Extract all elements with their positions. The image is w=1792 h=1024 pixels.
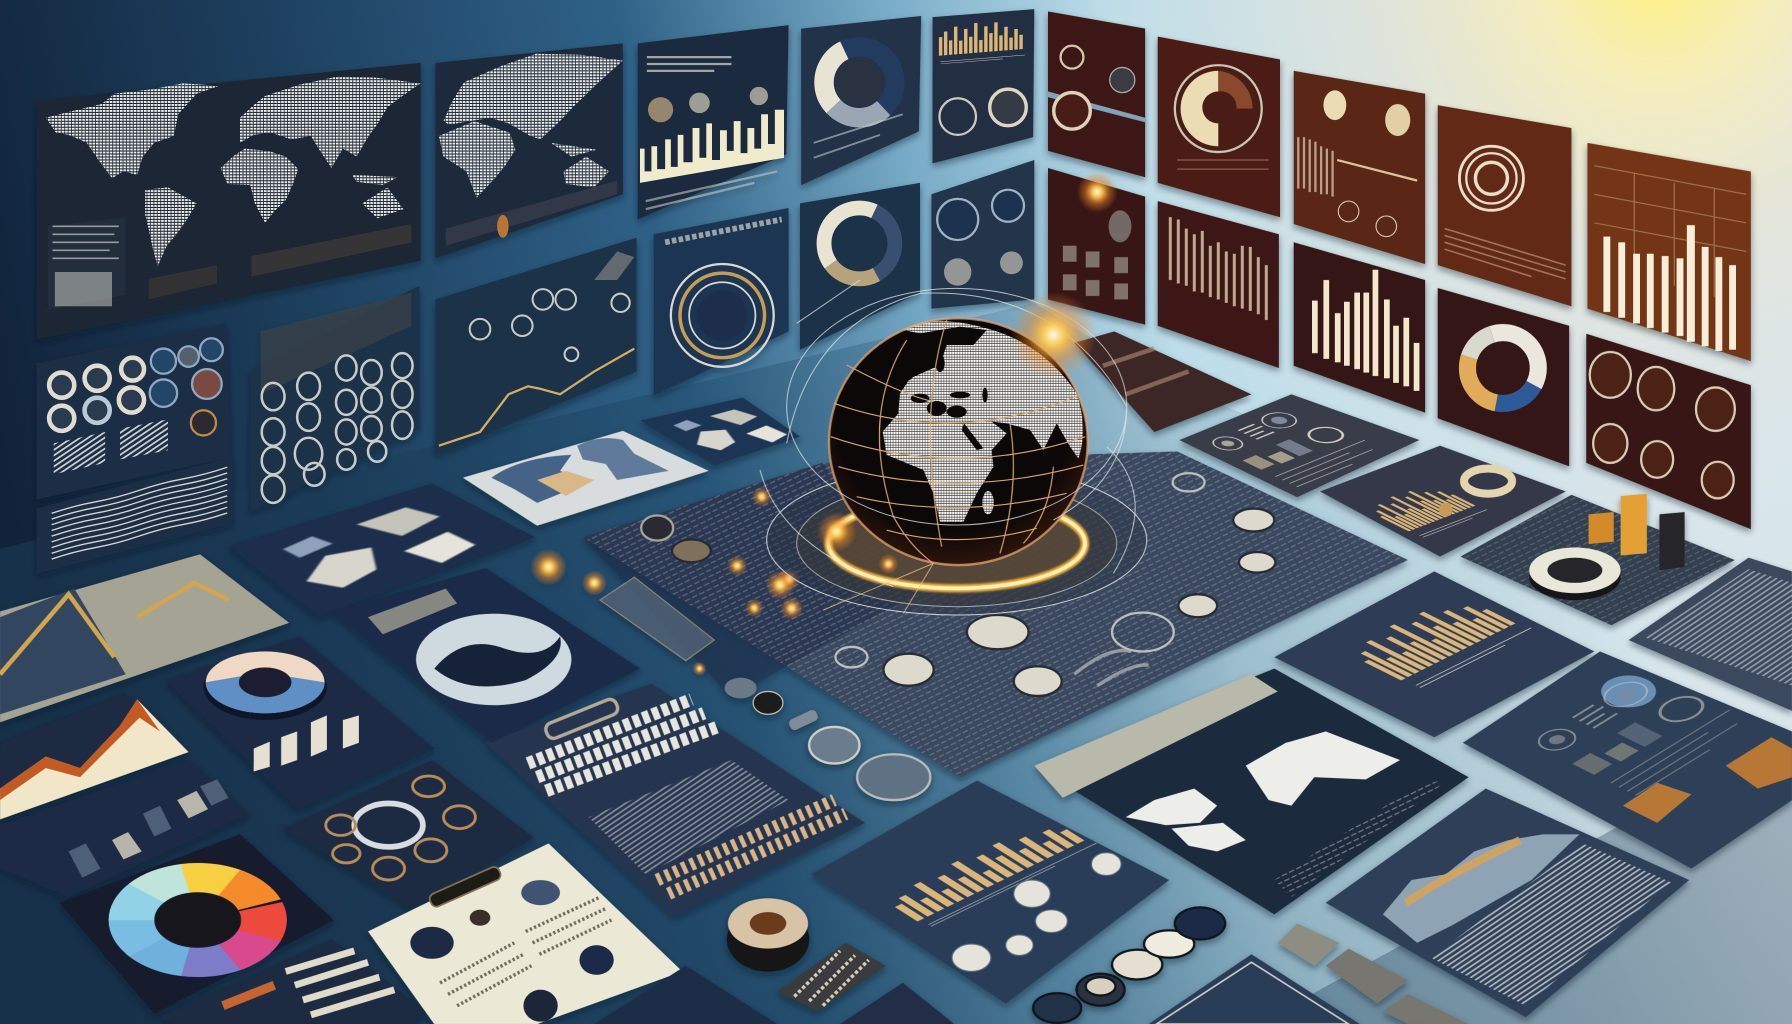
icon: bottom button row: [1033, 907, 1225, 1023]
panel: small navy card: [640, 398, 800, 465]
panel: icon matrix: [250, 286, 419, 512]
panel: golden wave chart: [1274, 571, 1594, 737]
land gaps: [903, 355, 988, 450]
icon: 3d blocks: [1589, 494, 1685, 570]
icon: lens flare: [752, 292, 1097, 620]
panel: open atlas book: [463, 431, 709, 526]
right wall panels: [1048, 11, 1751, 529]
globe centerpiece: [752, 280, 1147, 620]
panel: folded chart sheet: [0, 554, 289, 722]
panel: floor cards top right: [1179, 394, 1419, 497]
glass orbit lines: [760, 280, 1135, 613]
panel: orange bars sheet: [811, 781, 1169, 1003]
panel: maroon dense chart: [1158, 201, 1279, 368]
panel: maroon grid bar chart: [1587, 143, 1751, 361]
panel: maroon ring grid: [1586, 334, 1751, 529]
panel: world map large: [37, 63, 421, 339]
panel: swirling rings sheet: [283, 760, 534, 909]
panel: maroon donut: [1438, 288, 1569, 466]
panel: cream bar chart: [638, 25, 789, 219]
globe sphere: [829, 318, 1088, 565]
panel: donut chart: [801, 16, 921, 185]
icon: clip: [428, 865, 502, 908]
panel: maroon floor sheet: [1074, 331, 1251, 432]
panel: striped document: [486, 683, 865, 917]
panel: concentric rings: [1438, 105, 1571, 306]
panel: maroon icons 1: [1048, 11, 1145, 177]
map: dotted white continents: [1126, 731, 1400, 851]
panel: wavy lines: [37, 457, 232, 574]
panel: globe photo sheet: [331, 568, 640, 743]
panel: world map medium: [435, 43, 623, 258]
panel: line chart with nodes: [435, 238, 637, 455]
panel: icon rings: [37, 323, 231, 499]
panel: dark map sheet: [229, 483, 535, 617]
chart: donut: [824, 47, 895, 118]
panel: floor data sheet: [1463, 651, 1792, 869]
icon: textured tiles: [1278, 923, 1469, 1024]
panel: donut sheet: [166, 637, 434, 809]
panel: floor sheet with 3d bars: [1461, 494, 1735, 625]
left wall panels: [37, 9, 1034, 574]
panel: floor area chart: [1326, 789, 1689, 1017]
panel: floor ring sheet: [1320, 446, 1566, 557]
panel: orange area chart: [0, 694, 189, 819]
panel: color wheel sheet: [59, 834, 334, 1014]
icon: orange lights: [530, 549, 800, 675]
land: dotted continents: [883, 321, 1083, 522]
panel: maroon tall bars: [1294, 242, 1425, 413]
icon: bronze disc stack: [727, 898, 809, 971]
map: dotted continents: [46, 77, 421, 266]
panel: cream document: [368, 843, 682, 1024]
floor panels: [0, 331, 1792, 1024]
panel: striped sheet bottom: [160, 939, 425, 1024]
panel: edge sheet right: [1629, 558, 1792, 711]
chart: rainbow donut: [131, 878, 264, 962]
chart: pastel donut: [203, 651, 327, 720]
panel: maroon bars and icons: [1294, 71, 1425, 264]
panel: data rings: [931, 160, 1034, 309]
panel: central dashboard platform: [583, 451, 1408, 777]
panel: bottom edge sheets: [594, 954, 1360, 1024]
platform rings: [767, 465, 1147, 615]
icon: striped bar blocks: [777, 943, 886, 1011]
graticule: [831, 320, 1085, 563]
icon: buckle: [544, 697, 620, 740]
panel: data cards top: [933, 9, 1034, 163]
icon: 3d ring: [1529, 547, 1621, 600]
panel: second donut: [800, 183, 920, 350]
panel: maroon icon cards: [1048, 168, 1145, 325]
panel: concentric gauge: [654, 208, 789, 395]
panel: floor world map: [1034, 669, 1469, 914]
panel: maroon pie gauge: [1158, 37, 1280, 217]
panel: glass cards and lights: [530, 549, 930, 800]
panel: thumbnail grid sheet: [0, 760, 249, 897]
